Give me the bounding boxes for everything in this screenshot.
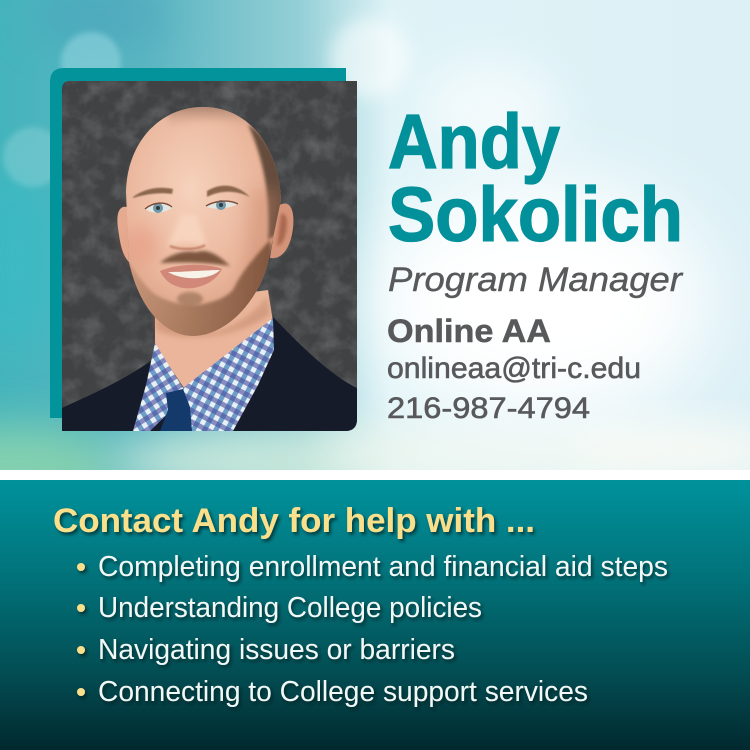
short dark hair at side [248, 124, 286, 240]
head [126, 107, 281, 336]
eyebrows [133, 186, 250, 198]
teal frame behind photo [50, 68, 346, 418]
nose [168, 215, 205, 249]
portrait photo [62, 81, 357, 431]
moustache [160, 251, 230, 266]
bottom panel: help topics [0, 480, 750, 750]
item: enrollment: Completing enrollment and financial aid steps [98, 551, 668, 583]
job title: Program Manager [388, 261, 684, 299]
heading: Contact Andy for help with ... [53, 502, 535, 540]
name: Sokolich [388, 172, 683, 258]
phone: 216-987-4794 [387, 392, 590, 425]
photo background wall [62, 81, 357, 431]
eyes [145, 200, 238, 213]
shirt collar right [183, 318, 274, 431]
jacket [62, 317, 357, 431]
shirt collar left [133, 343, 183, 431]
name [388, 99, 683, 258]
tie [160, 389, 192, 431]
mouth [160, 265, 222, 288]
face right side shading [242, 184, 281, 266]
beard [127, 240, 274, 340]
white divider strip [0, 470, 750, 480]
neck [155, 290, 273, 388]
department: Online AA [387, 313, 551, 349]
bullet list [77, 551, 668, 708]
ear left [117, 207, 129, 262]
email: onlineaa@tri-c.edu [387, 352, 641, 385]
item: policies: Understanding College policies [98, 592, 482, 624]
name: Andy [388, 99, 560, 185]
cheek blush [126, 225, 158, 265]
item: support services: Connecting to College support services [98, 676, 588, 708]
item: barriers: Navigating issues or barriers [98, 634, 455, 666]
background: soft teal and white bokeh [0, 0, 750, 515]
scalp stubble [166, 107, 246, 124]
chin patch [177, 292, 203, 306]
ear right [270, 203, 293, 258]
